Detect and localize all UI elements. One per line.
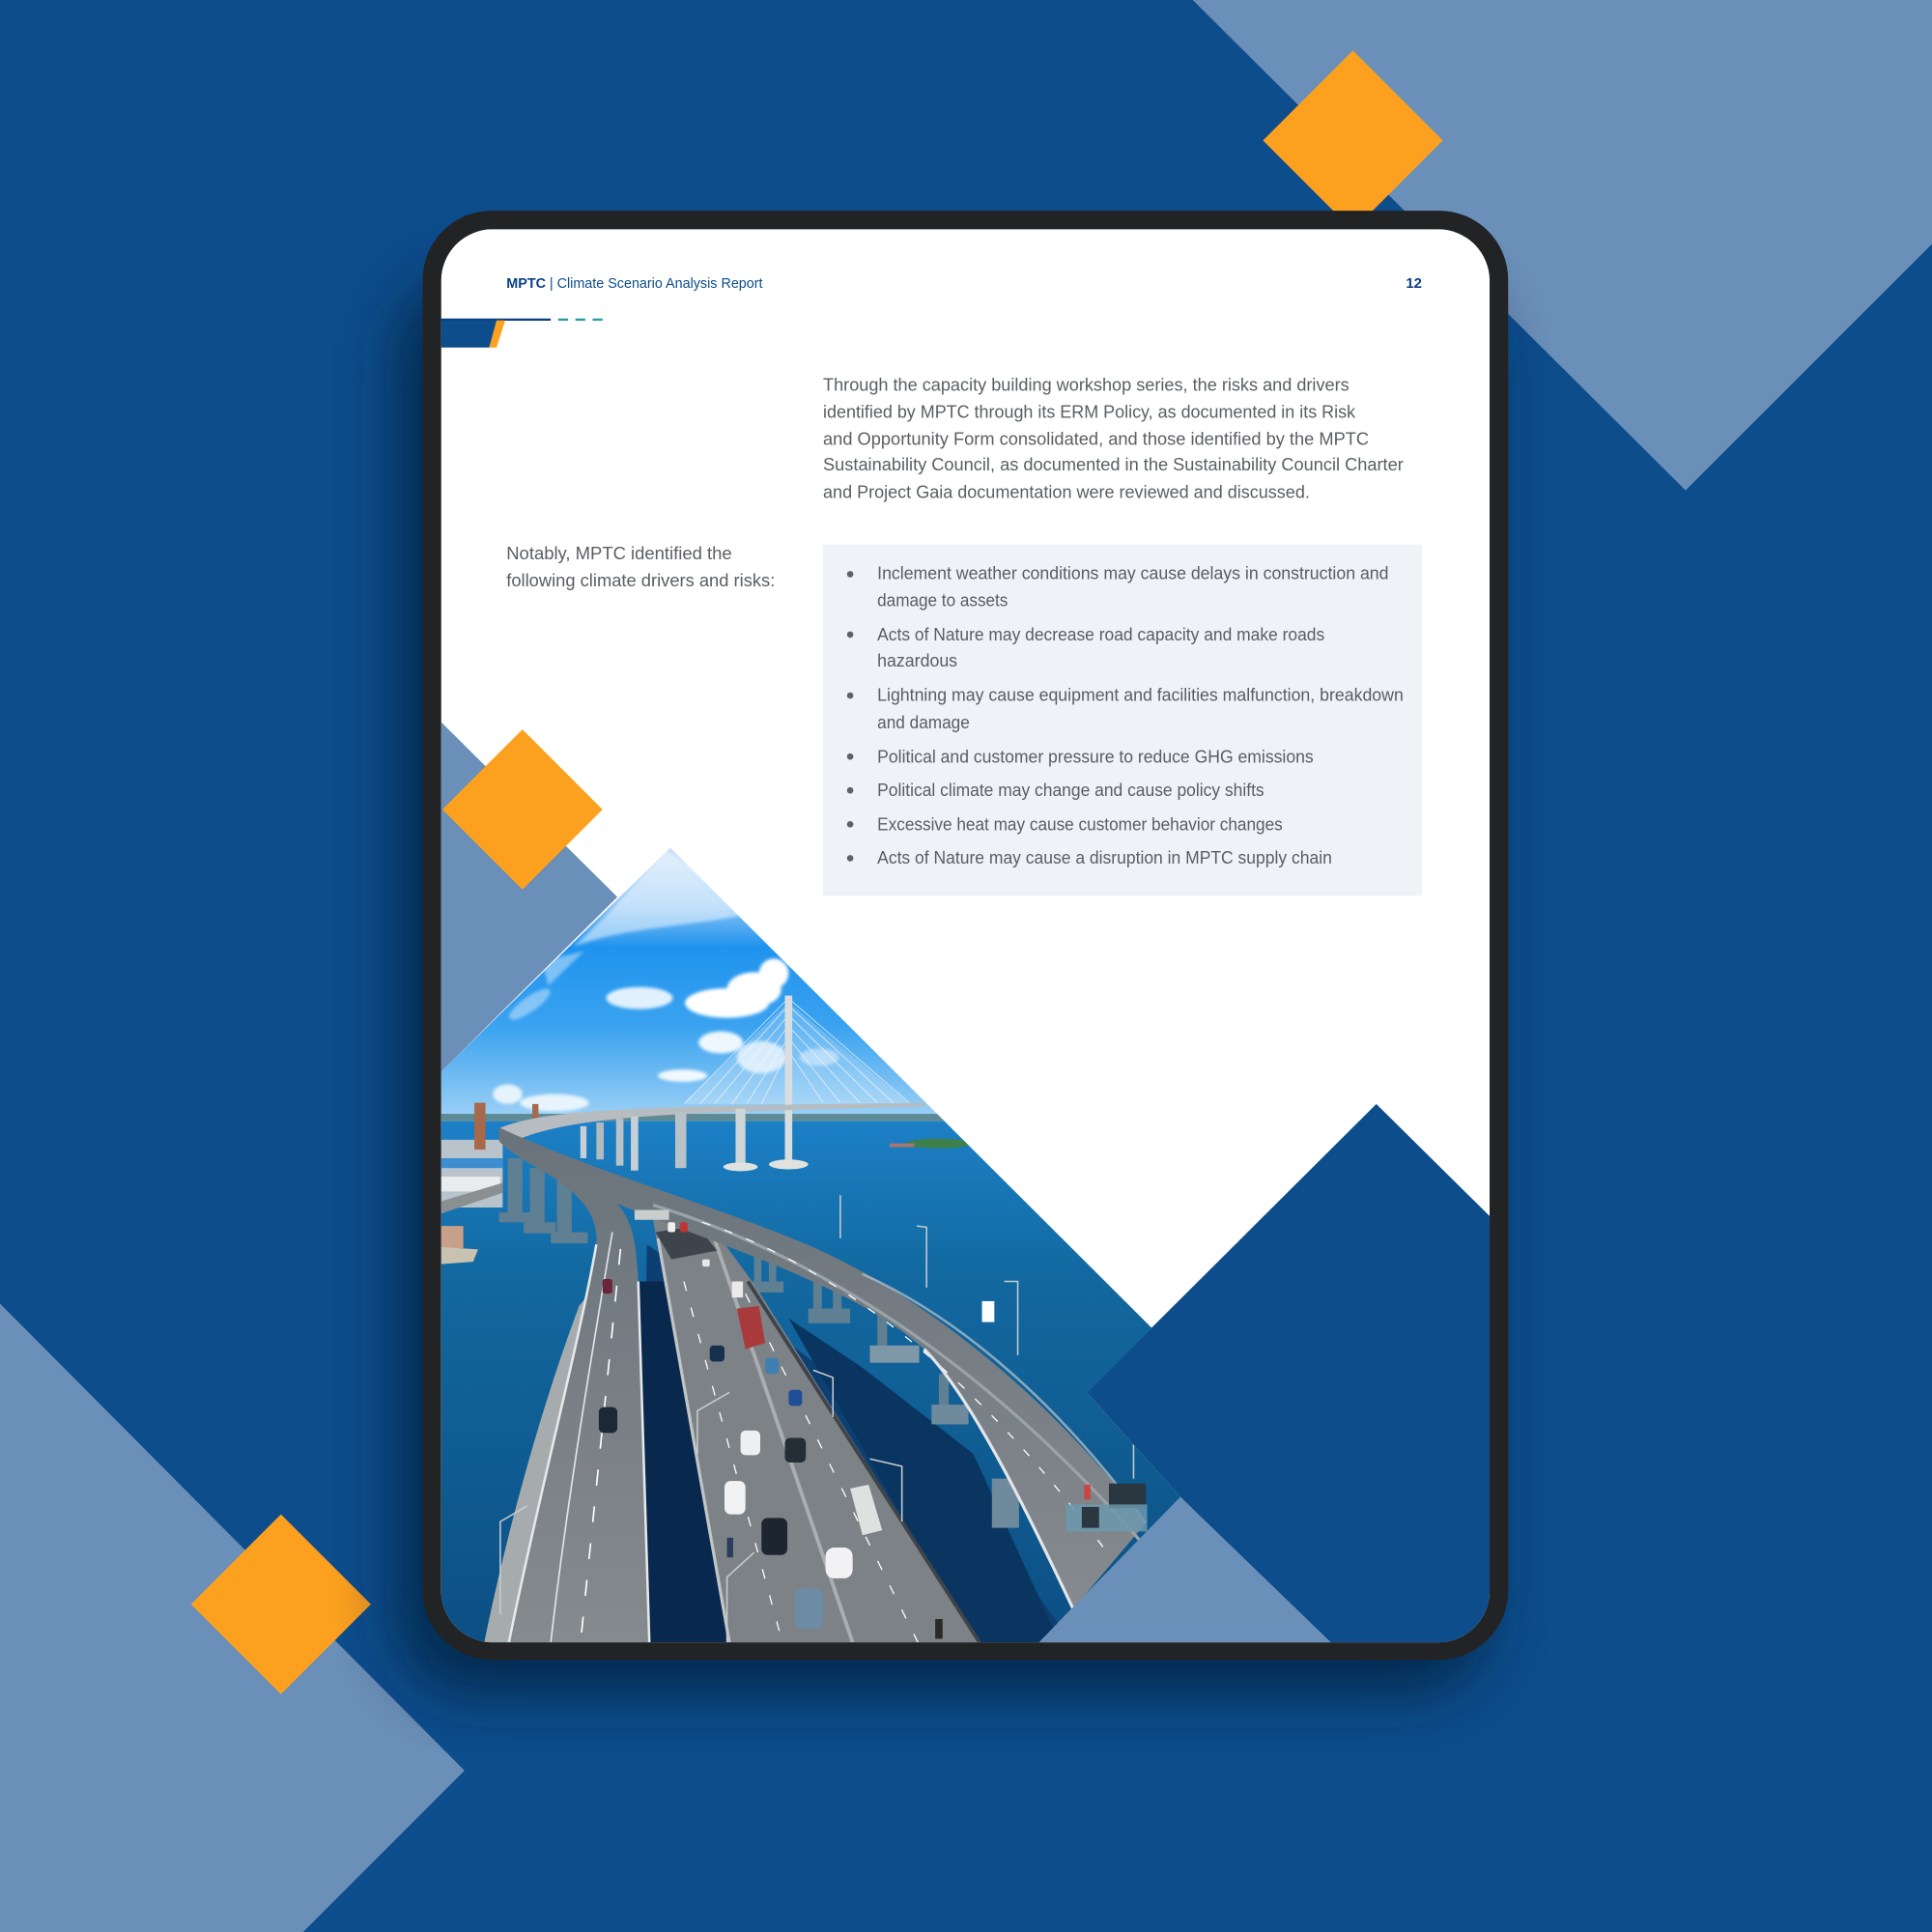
panel: climate drivers and risks list: Political and customer pressure to reduce GHG emissions [877,747,1314,767]
lamp posts [500,1195,1133,1642]
bridge deck and piers [499,1103,926,1171]
far shore [441,1114,983,1122]
icon: top right orange diamond [1263,50,1443,231]
header band decoration [441,319,603,348]
panel: climate drivers and risks list: damage to assets [877,590,1008,611]
road: left carriageway [484,1131,649,1642]
background shape: top right light panel [1193,0,1932,491]
intro paragraph: Through the capacity building workshop series, the risks and drivers [823,374,1350,394]
panel: climate drivers and risks list [823,545,1422,895]
vehicles [599,1222,1091,1638]
port buildings [441,1103,538,1264]
sign boards [982,1301,1148,1531]
page shape: right dark blue block [1087,1104,1490,1642]
intro paragraph: identified by MPTC through its ERM Policy, as documented in its Risk [823,401,1356,421]
sky [440,848,949,1124]
panel: climate drivers and risks list: Acts of Nature may decrease road capacity and make roads [877,624,1324,644]
left lead-in text: following climate drivers and risks: [506,570,775,590]
page shape: left light triangle [441,722,617,1072]
background shape: bottom left light panel [0,1303,465,1932]
icon: bottom left orange diamond [191,1515,371,1694]
left lead-in text: Notably, MPTC identified the [506,543,732,563]
intro paragraph: and Opportunity Form consolidated, and those identified by the MPTC [823,428,1369,448]
dark water in road shadow [640,1244,1072,1642]
header title: | Climate Scenario Analysis Report [550,276,763,292]
sea [441,1122,1205,1645]
panel: climate drivers and risks list: Lightning may cause equipment and facilities malfunction, breakdown [877,685,1404,705]
photo: bridge and expressway in diamond crop [441,848,1205,1645]
low piers [499,1158,1019,1528]
island [890,1139,971,1149]
panel: climate drivers and risks list: Acts of Nature may cause a disruption in MPTC supply chain [877,847,1332,867]
device frame [423,211,1508,1660]
intro paragraph [823,374,1404,501]
intro paragraph: and Project Gaia documentation were reviewed and discussed. [823,481,1310,501]
panel: climate drivers and risks list: Political climate may change and cause policy shifts [877,780,1264,800]
road: centre carriageways [653,1217,980,1642]
page shape: bottom light triangle [1038,1497,1331,1642]
header title: MPTC [506,276,546,292]
page screen [441,229,1490,1645]
panel: climate drivers and risks list: Inclement weather conditions may cause delays in construction and [877,562,1389,582]
panel: climate drivers and risks list: and damage [877,712,970,732]
road: curving elevated carriageway [499,1127,1146,1611]
icon: page orange diamond [442,729,603,890]
clouds [493,850,839,1112]
cable stayed tower and cables [684,996,909,1169]
page number: 12 [1406,276,1422,292]
panel: climate drivers and risks list: hazardous [877,650,957,670]
left lead-in text [506,543,775,590]
intro paragraph: Sustainability Council, as documented in the Sustainability Council Charter [823,454,1404,474]
device shadow [397,277,1488,1694]
panel: climate drivers and risks list: Excessive heat may cause customer behavior changes [877,814,1283,835]
